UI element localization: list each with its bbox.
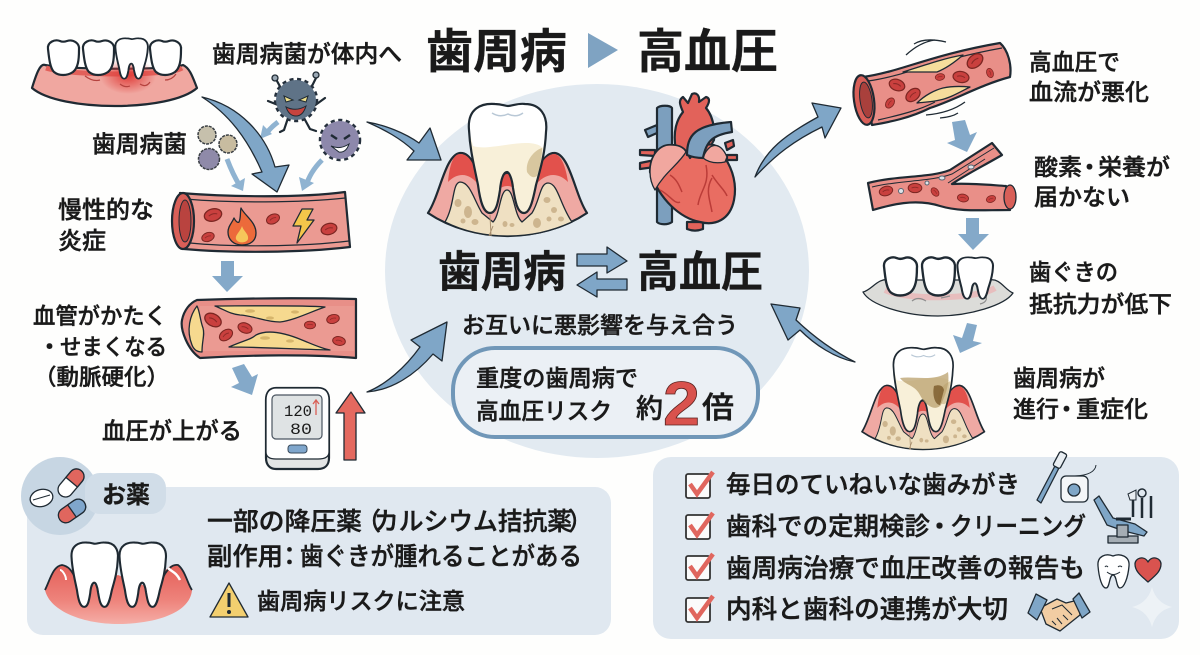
label: chronic inflammation: 慢性的な (58, 197, 154, 224)
label: vessels harden: せまくなる (60, 335, 167, 360)
label: gum resistance drops: 抵抗力が低下 (1029, 291, 1172, 317)
label: vessels harden: ・ (38, 335, 61, 360)
illustration: periodontal tooth (428, 104, 587, 236)
large arrow: teeth to vessel (202, 97, 289, 192)
text: antihypertensive (207, 508, 593, 536)
text: antihypertensive: 一部の降圧薬 (207, 508, 362, 536)
label: oxygen and nutrients (1034, 154, 1170, 210)
label: oxygen and nutrients: 酸素 (1034, 154, 1082, 180)
label: gum resistance drops (1029, 259, 1172, 317)
icon: blood pressure monitor (266, 388, 329, 469)
icon: small germs (198, 126, 237, 170)
arrow: down (212, 261, 243, 292)
label: chronic inflammation (58, 197, 154, 255)
label: progression: 重症化 (1076, 396, 1148, 422)
illustration: forked vessel (868, 143, 1016, 210)
icon: lightning (293, 209, 314, 243)
callout: double risk: 倍 (702, 392, 734, 425)
label: progression (1013, 365, 1148, 422)
illustration: heart (640, 93, 737, 230)
label: blood flow worsens (1029, 49, 1149, 105)
callout: double risk: 重度の歯周病で (476, 365, 638, 391)
illustration: swollen gums (45, 542, 192, 624)
checklist item 2 (686, 513, 1086, 541)
label: medicine tab: お薬 (102, 482, 150, 509)
label: progression: 歯周病が (1013, 365, 1105, 391)
icon: red up arrow (336, 392, 365, 460)
text: caution: 歯周病リスクに注意 (257, 588, 465, 614)
text: antihypertensive: ） (568, 508, 593, 536)
checklist item 2: 歯科での定期検診 (726, 513, 930, 541)
label: oxygen and nutrients: 届かない (1034, 184, 1130, 210)
label: periodontitis vs hypertension: 高血圧 (637, 249, 763, 297)
icon: handshake (1028, 593, 1090, 631)
arrow: down (958, 218, 989, 250)
illustration: pale gums (863, 257, 1013, 316)
arrow: diagonal down (953, 323, 982, 353)
label: bacteria enter the body: 歯周病菌が体内へ (212, 41, 402, 67)
label: oxygen and nutrients: 栄養が (1098, 154, 1170, 180)
label: vessels harden: 血管がかたく (33, 304, 167, 329)
callout: double risk (453, 348, 758, 439)
callout: double risk: 2 (663, 370, 700, 439)
label: periodontitis vs hypertension: 歯周病 (438, 249, 566, 297)
title: 歯周病 (426, 25, 567, 78)
arrow: tooth to centre (771, 304, 855, 362)
arrow: down to branch (947, 120, 977, 152)
checklist item 3: 歯周病治療で血圧改善の報告も (726, 555, 1085, 583)
illustration: advanced periodontitis (862, 348, 984, 449)
checklist item 2: ・ (927, 513, 952, 541)
label: periodontal bacteria: 歯周病菌 (92, 131, 187, 157)
panel: prevention (653, 451, 1179, 639)
text: antihypertensive: カルシウム拮抗薬 (374, 508, 572, 536)
label: blood pressure rises: 血圧が上がる (102, 418, 242, 444)
icon: sparkle (1132, 587, 1172, 627)
label: blood flow worsens: 血流が悪化 (1029, 79, 1149, 105)
checklist item 4: 内科と歯科の連携が大切 (726, 596, 1008, 624)
text: side effect: 副作用 (207, 543, 283, 571)
illustration: narrowed artery (182, 298, 356, 358)
icon: purple bacterium (320, 120, 360, 160)
illustration: inflamed vessel (172, 192, 350, 252)
label: vessels harden: （動脈硬化） (34, 365, 169, 390)
illustration: gum with inflamed teeth (32, 38, 197, 106)
arrow: centre to vessel (755, 103, 841, 177)
callout: double risk: 約 (636, 394, 663, 424)
label: oxygen and nutrients: ・ (1078, 154, 1101, 180)
icon: dental chair (1094, 489, 1151, 543)
arrow: diagonal down (231, 364, 258, 395)
callout: double risk: 高血圧リスク (476, 398, 612, 424)
icon: toothbrush and floss (1037, 451, 1096, 503)
icon: blood pressure monitor: 80 (290, 421, 312, 439)
icon: pills (28, 466, 89, 526)
title: 高血圧 (637, 25, 778, 78)
label: mutual harm: お互いに悪影響を与え合う (462, 312, 738, 338)
text: side effect: 歯ぐきが腫れることがある (300, 543, 582, 571)
label: progression: 進行 (1013, 396, 1059, 422)
label: progression: ・ (1055, 396, 1078, 422)
text: antihypertensive: （ (356, 508, 381, 536)
central circle (385, 84, 809, 458)
label: gum resistance drops: 歯ぐきの (1029, 259, 1118, 285)
text: side effect: ： (277, 543, 302, 571)
icon: flame (228, 208, 256, 245)
icon: heart (1135, 558, 1161, 582)
label: vessels harden (33, 304, 169, 390)
label: blood flow worsens: 高血圧で (1029, 49, 1120, 75)
illustration: damaged vessel (851, 40, 1011, 126)
checklist item 1: 毎日のていねいな歯みがき (726, 471, 1020, 499)
icon: blood pressure monitor: 120 (284, 403, 312, 421)
small arrows: bacteria into vessel (227, 122, 322, 191)
panel: medication (21, 457, 611, 635)
arrow: bp to centre (367, 322, 447, 392)
title (426, 25, 778, 78)
arrow: bacteria to centre (367, 122, 441, 160)
label: periodontitis vs hypertension (438, 247, 763, 297)
label: chronic inflammation: 炎症 (58, 228, 106, 255)
icon: warning (210, 583, 248, 617)
icon: smiling tooth (1098, 555, 1129, 588)
checklist item 2: クリーニング (950, 513, 1086, 541)
icon: large bacterium (268, 72, 325, 132)
